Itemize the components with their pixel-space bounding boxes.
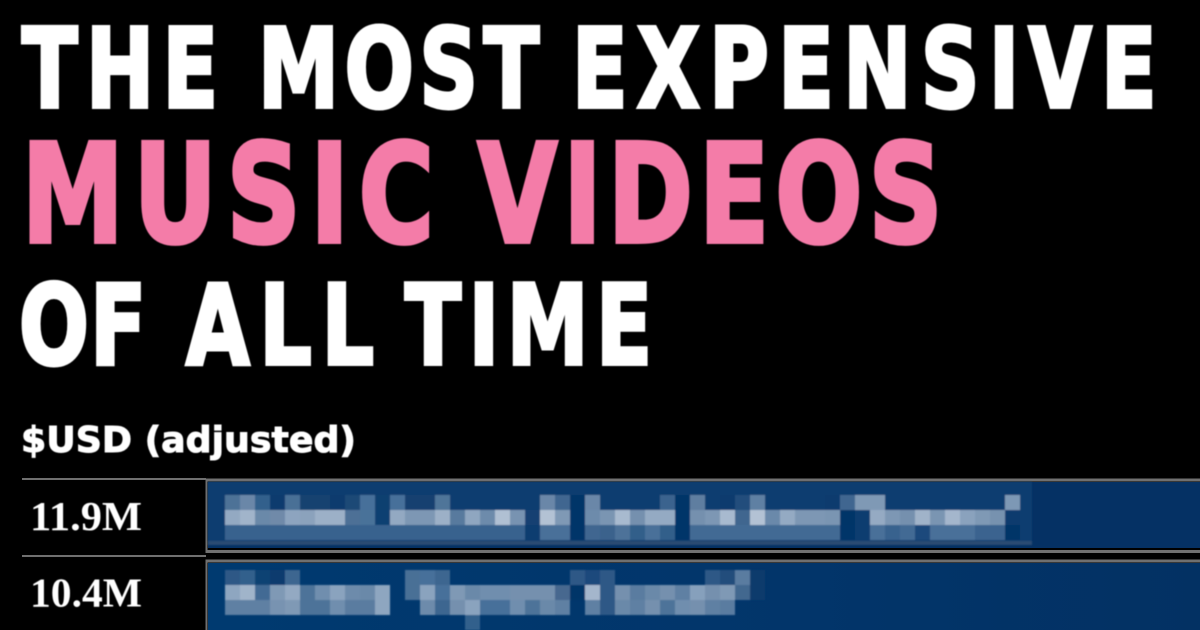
table row 1 (22, 478, 1200, 553)
title line 1: THE MOST EXPENSIVE (22, 5, 1157, 133)
title line 2: MUSIC VIDEOS: VIDEOS (478, 116, 942, 274)
row 2 censored label (225, 570, 765, 630)
row 1 censored label (208, 482, 1032, 545)
column label: $USD (adjusted): $USD (adjusted) (21, 420, 356, 461)
row 1 rules (22, 478, 1200, 553)
row 1 bar (208, 482, 1200, 548)
title line 1: THE MOST EXPENSIVE: EXPENSIVE (572, 5, 1157, 133)
table row 2 (22, 555, 1200, 630)
title (19, 5, 1157, 391)
title line 3: OF ALL TIME: TIME (405, 262, 652, 391)
row 2 rules (22, 555, 1200, 630)
row 2 bar (208, 563, 1200, 630)
title line 3: OF ALL TIME (19, 262, 652, 391)
title line 1: THE MOST EXPENSIVE: MOST (258, 5, 539, 133)
row 1 value: 11.9M (30, 493, 142, 539)
title line 2: MUSIC VIDEOS (22, 116, 942, 274)
title line 1: THE MOST EXPENSIVE: THE (22, 5, 218, 133)
title line 3: OF ALL TIME: OF (19, 262, 146, 391)
title line 2: MUSIC VIDEOS: MUSIC (22, 116, 434, 274)
row 2 value: 10.4M (30, 570, 142, 616)
title line 3: OF ALL TIME: ALL (186, 262, 374, 391)
